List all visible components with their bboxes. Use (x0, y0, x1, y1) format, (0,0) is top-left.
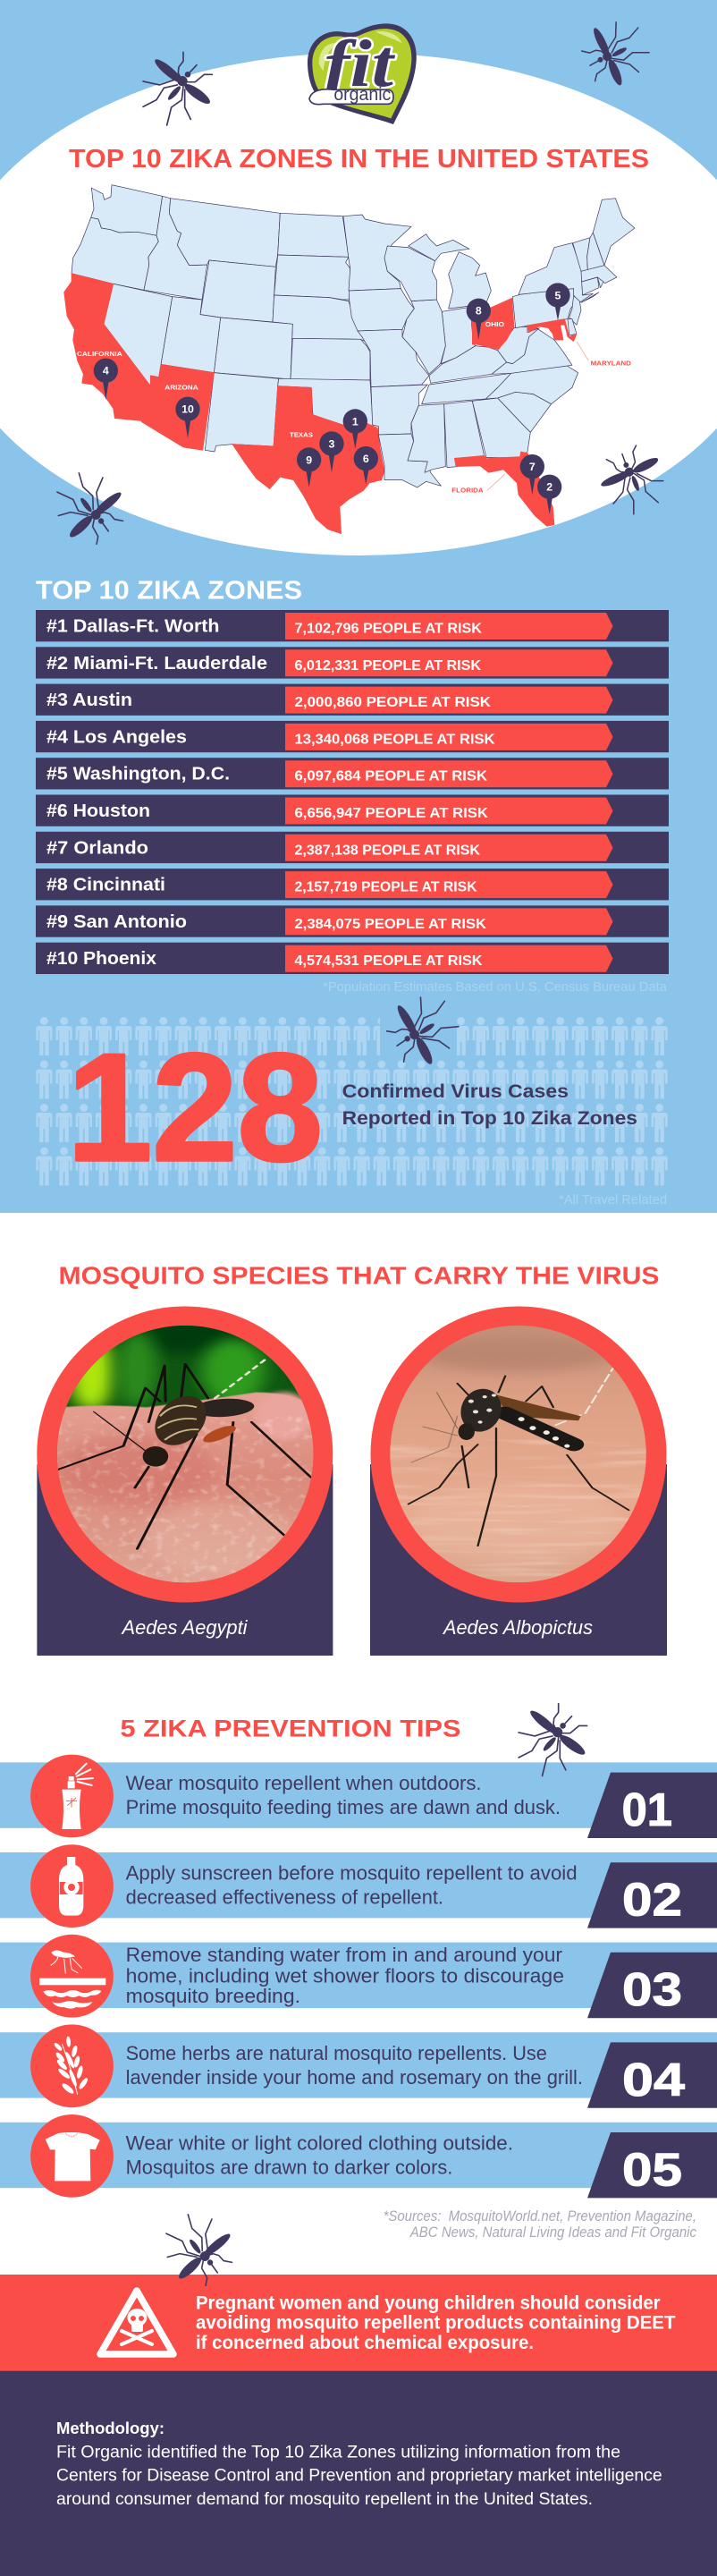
logo: fit organic heart (308, 23, 417, 124)
pin 4 (94, 359, 118, 400)
label: Arizona: ARIZONA (164, 384, 198, 392)
decorative gap behind mosquito (380, 1011, 457, 1059)
tip 3: Remove standing water from in and around your (126, 1944, 562, 1966)
panel: methodology (0, 2371, 717, 2576)
panel: warning band (0, 2275, 717, 2371)
tip 4: Some herbs are natural mosquito repellents. Use (126, 2042, 547, 2064)
panel: white oval behind map (0, 53, 717, 555)
tip 5 (0, 2114, 717, 2198)
heading: top 10 zika zones: TOP 10 ZIKA ZONES (36, 577, 302, 606)
tip 3 (0, 1935, 717, 2018)
row 1: 7,102,796 PEOPLE AT RISK (295, 621, 482, 637)
row 3: 2,000,860 PEOPLE AT RISK (295, 695, 491, 710)
tip 5: Mosquitos are drawn to darker colors. (126, 2156, 452, 2179)
caption: Aedes Aegypti: Aedes Aegypti (121, 1616, 249, 1639)
pin 5: 5 (555, 289, 561, 301)
methodology heading: Methodology: (56, 2419, 164, 2437)
caption: Aedes Albopictus: Aedes Albopictus (442, 1616, 593, 1639)
statistic caption: Confirmed Virus Cases (342, 1081, 569, 1102)
warning text: Pregnant women and young children should consider (196, 2292, 661, 2313)
methodology text: Centers for Disease Control and Prevention and proprietary market intelligence (56, 2467, 662, 2486)
row 6: #6 Houston (46, 801, 150, 821)
table: ranked zones (36, 610, 669, 974)
row 8: 2,157,719 PEOPLE AT RISK (295, 880, 477, 895)
tip 2: decreased effectiveness of repellent. (126, 1886, 443, 1909)
photo: Aedes Albopictus on skin (389, 1326, 649, 1583)
pin 2: 2 (546, 481, 553, 494)
row 8: #8 Cincinnati (46, 875, 165, 895)
pin 7: 7 (529, 461, 536, 473)
pin 5 (545, 283, 570, 320)
row 4 (36, 721, 669, 752)
icon: mosquito above warning band (158, 2211, 240, 2290)
logo wordmark: fit: fit (325, 28, 395, 102)
pin 2 (537, 475, 561, 514)
label: Florida with leader line: FLORIDA (451, 486, 484, 494)
row 2: #2 Miami-Ft. Lauderdale (46, 653, 267, 674)
photo: Aedes Aegypti on skin (55, 1318, 316, 1583)
row 1 (36, 610, 669, 641)
icon: herb sprig (53, 2036, 89, 2095)
footnote: travel related: *All Travel Related (559, 1193, 667, 1208)
icon: mosquito near tips heading (519, 1704, 587, 1776)
tip 2: 02 (622, 1875, 682, 1927)
map: eastern United States (343, 199, 635, 526)
pin 10: 10 (181, 403, 194, 416)
methodology text: Fit Organic identified the Top 10 Zika Zones utilizing information from the (56, 2443, 620, 2462)
tip 1 (0, 1755, 717, 1838)
tip 3: mosquito breeding. (126, 1985, 300, 2007)
row 9: 2,384,075 PEOPLE AT RISK (295, 917, 486, 932)
icon: mosquito lower left (49, 470, 131, 548)
row 5: 6,097,684 PEOPLE AT RISK (295, 769, 487, 784)
map: western United States (64, 185, 384, 534)
row 7: 2,387,138 PEOPLE AT RISK (295, 843, 480, 858)
state: Ohio (472, 298, 514, 350)
tip 3: 03 (622, 1964, 682, 2016)
statistic: 128: 128 (67, 1022, 323, 1193)
tip 1: 01 (622, 1784, 672, 1836)
tip 4: lavender inside your home and rosemary on the grill. (126, 2066, 583, 2089)
row 1: #1 Dallas-Ft. Worth (46, 615, 220, 637)
tip 2 (0, 1844, 717, 1928)
tip 1: Prime mosquito feeding times are dawn and dusk. (126, 1796, 561, 1818)
row 10 (36, 943, 669, 974)
row 9: #9 San Antonio (46, 911, 187, 932)
label: Texas: TEXAS (290, 430, 313, 438)
state: Arizona (141, 364, 214, 450)
row 6 (36, 794, 669, 826)
tip 5: 05 (622, 2144, 682, 2196)
panel: Aedes Albopictus (370, 1306, 667, 1656)
pictogram: rows of people (35, 1016, 671, 1190)
row 2: 6,012,331 PEOPLE AT RISK (295, 658, 481, 674)
pin 8: 8 (476, 305, 482, 318)
pin 3: 3 (329, 437, 335, 450)
pin 3 (319, 431, 344, 472)
icon: mosquito above statistic (383, 993, 462, 1070)
row 2 (36, 647, 669, 679)
row 5 (36, 758, 669, 789)
pin 9: 9 (306, 453, 312, 466)
row 10: 4,574,531 PEOPLE AT RISK (295, 953, 483, 969)
pin 6: 6 (363, 453, 369, 465)
warning text (196, 2292, 676, 2353)
title: TOP 10 ZIKA ZONES IN THE UNITED STATES (69, 145, 649, 174)
state: Texas (232, 386, 384, 534)
label: Florida with leader line (451, 474, 505, 494)
heading: prevention tips: 5 ZIKA PREVENTION TIPS (120, 1716, 461, 1742)
row 7 (36, 832, 669, 863)
pin 6 (354, 446, 378, 485)
tip 4 (0, 2024, 717, 2108)
icon: mosquito top left (143, 52, 213, 125)
icon: mosquito over standing water (39, 1950, 105, 2009)
pin 7 (520, 454, 544, 495)
row 5: #5 Washington, D.C. (46, 764, 230, 784)
row 6: 6,656,947 PEOPLE AT RISK (295, 806, 488, 821)
pin 1: 1 (352, 415, 358, 428)
icon: mosquito lower right (590, 436, 677, 521)
state: Maryland (527, 319, 577, 342)
statistic caption (342, 1081, 637, 1129)
row 8 (36, 869, 669, 900)
tip 1: Wear mosquito repellent when outdoors. (126, 1772, 482, 1794)
pin 1 (343, 409, 367, 449)
tip 5: Wear white or light colored clothing outside. (126, 2132, 513, 2154)
icon: sunscreen bottle (59, 1857, 83, 1916)
logo wordmark: organic: organic (333, 84, 391, 105)
warning text: avoiding mosquito repellent products containing DEET (196, 2313, 676, 2334)
label: Ohio: OHIO (485, 320, 504, 328)
row 9 (36, 905, 669, 937)
panel: Aedes Aegypti (37, 1306, 333, 1656)
map labels and pins: west (77, 350, 378, 487)
heading: mosquito species: MOSQUITO SPECIES THAT CARRY THE VIRUS (59, 1262, 660, 1290)
methodology text: around consumer demand for mosquito repellent in the United States. (56, 2490, 593, 2509)
pin 8 (467, 299, 491, 340)
state: Florida (454, 452, 554, 526)
statistic caption: Reported in Top 10 Zika Zones (342, 1108, 637, 1129)
row 3: #3 Austin (46, 690, 132, 710)
row 10: #10 Phoenix (46, 948, 157, 969)
icon: white shirt (46, 2132, 100, 2181)
row 4: #4 Los Angeles (46, 726, 187, 747)
panel: hero and zones background (0, 0, 717, 1213)
tip 4: 04 (622, 2055, 685, 2106)
warning text: if concerned about chemical exposure. (196, 2333, 534, 2353)
methodology text (56, 2443, 662, 2509)
row 7: #7 Orlando (46, 837, 148, 858)
label: Maryland with leader line (577, 342, 631, 367)
pin 4: 4 (103, 365, 109, 377)
pin 10 (175, 397, 200, 438)
sources (384, 2207, 696, 2241)
icon: repellent spray (62, 1764, 93, 1829)
tip 2: Apply sunscreen before mosquito repellent to avoid (126, 1862, 578, 1885)
tip 3: home, including wet shower floors to discourage (126, 1964, 564, 1987)
pin 9 (297, 447, 321, 487)
icon: mosquito top right (576, 16, 654, 92)
state: California (64, 274, 154, 421)
footnote: population estimates: *Population Estimates Based on U.S. Census Bureau Data (323, 980, 668, 995)
label: California: CALIFORNIA (77, 350, 122, 358)
row 3 (36, 684, 669, 716)
map labels and pins: east (451, 283, 631, 514)
row 4: 13,340,068 PEOPLE AT RISK (295, 732, 495, 747)
label: Maryland with leader line: MARYLAND (591, 359, 631, 367)
icon: skull warning triangle (100, 2291, 173, 2354)
